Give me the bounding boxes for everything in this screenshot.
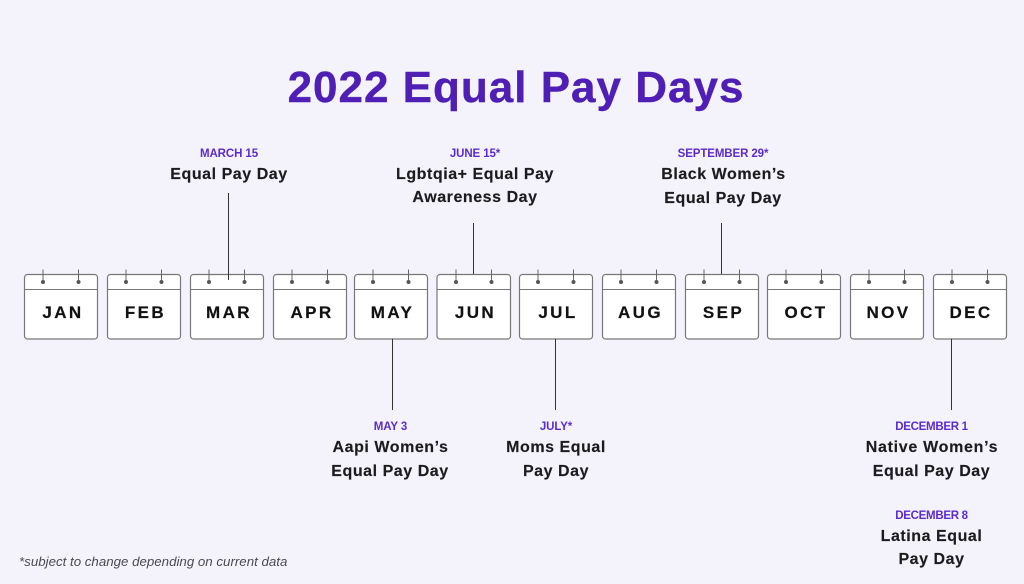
- connector: May: [392, 339, 394, 410]
- calendar: DEC: DEC: [949, 303, 993, 322]
- event: July: JULY*: [540, 421, 573, 433]
- calendar: APR: [274, 270, 346, 339]
- event: March 15: [170, 148, 288, 183]
- calendar: SEP: SEP: [703, 303, 744, 322]
- event: June 15: Awareness Day: [412, 189, 538, 206]
- calendar: NOV: NOV: [866, 303, 911, 322]
- calendar: SEP: [686, 270, 758, 339]
- event: July: [506, 421, 606, 480]
- calendar: MAY: MAY: [371, 303, 414, 322]
- event: March 15: Equal Pay Day: [170, 166, 288, 183]
- event: July: Moms Equal: [506, 439, 606, 456]
- event: May 3: [331, 421, 449, 480]
- title: 2022 Equal Pay Days: [288, 63, 744, 112]
- event: September 29: [661, 148, 786, 207]
- calendar: FEB: FEB: [125, 303, 166, 322]
- event: July: Pay Day: [523, 463, 589, 480]
- connector: December: [950, 339, 952, 410]
- calendar: JAN: [24, 270, 98, 339]
- calendar row: [24, 270, 1006, 339]
- event: June 15: Lgbtqia+ Equal Pay: [396, 166, 554, 183]
- event: December 1: [866, 421, 998, 480]
- event: May 3: Aapi Women’s: [333, 439, 448, 456]
- calendar: AUG: AUG: [618, 303, 663, 322]
- event: December 8: DECEMBER 8: [895, 510, 969, 522]
- calendar: JUN: [437, 270, 510, 339]
- event: March 15: MARCH 15: [200, 148, 259, 160]
- calendar: NOV: [850, 270, 924, 339]
- calendar: JAN: JAN: [42, 303, 84, 322]
- event: December 1: DECEMBER 1: [895, 421, 969, 433]
- event: June 15: [396, 148, 554, 206]
- calendar: APR: APR: [290, 303, 334, 322]
- event: September 29: Equal Pay Day: [664, 190, 782, 207]
- calendar: MAY: [354, 270, 428, 339]
- event: December 1: Native Women’s: [866, 439, 998, 456]
- calendar: OCT: OCT: [784, 303, 828, 322]
- footnote: *subject to change depending on current data: [19, 554, 287, 569]
- event: December 1: Equal Pay Day: [873, 463, 990, 480]
- event: December 8: Latina Equal: [881, 528, 982, 545]
- calendar: DEC: [934, 270, 1006, 339]
- event: December 8: [881, 510, 982, 568]
- calendar: JUN: JUN: [455, 303, 496, 322]
- event: May 3: Equal Pay Day: [331, 463, 449, 480]
- calendar: MAR: MAR: [206, 303, 252, 322]
- calendar: FEB: [108, 270, 180, 339]
- connector: June: [472, 223, 474, 274]
- event: December 8: Pay Day: [898, 551, 965, 568]
- event: May 3: MAY 3: [374, 421, 407, 433]
- calendar: OCT: [768, 270, 840, 339]
- calendar: JUL: JUL: [538, 303, 578, 322]
- connector: September: [720, 223, 722, 274]
- event: June 15: JUNE 15*: [450, 148, 501, 160]
- calendar: AUG: [602, 270, 676, 339]
- event: September 29: Black Women’s: [661, 166, 786, 183]
- event: September 29: SEPTEMBER 29*: [678, 148, 769, 160]
- calendar: MAR: [190, 270, 264, 339]
- connector: July: [554, 339, 556, 410]
- calendar: JUL: [520, 270, 592, 339]
- connector: March: [228, 193, 230, 280]
